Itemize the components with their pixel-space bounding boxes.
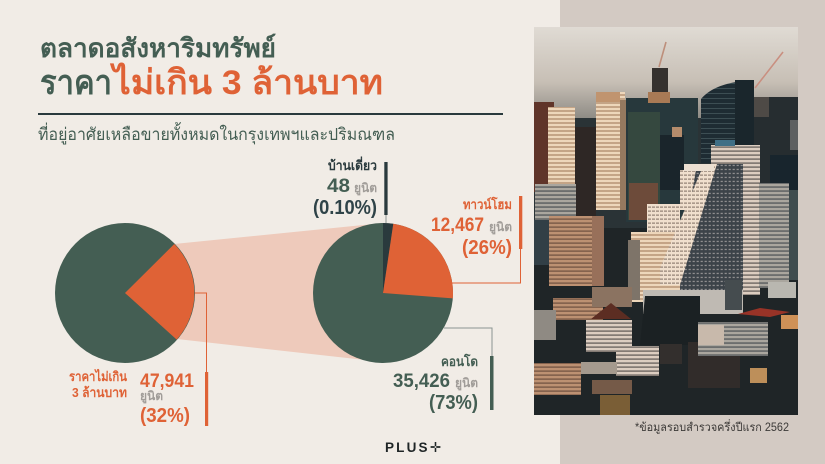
callout: detached house <box>313 156 388 223</box>
callout: townhome: ยูนิต <box>489 220 512 235</box>
construction tower <box>626 98 698 222</box>
footnote: *ข้อมูลรอบสำรวจครึ่งปีแรก 2562 <box>635 419 789 434</box>
red roof building <box>591 303 631 319</box>
logo: PLUS✛ <box>385 440 441 455</box>
callout: under 3 million baht: 3 ล้านบาท <box>72 385 127 400</box>
callout: condo <box>393 328 494 414</box>
callout: under 3 million baht: ยูนิต <box>140 389 163 404</box>
funnel connector between pies <box>174 223 383 362</box>
callout: condo: (73%) <box>429 392 478 414</box>
tall cream tower <box>596 92 625 210</box>
right side panel <box>560 0 825 464</box>
callout: detached house: 48 <box>327 176 350 197</box>
callout: townhome: 12,467 <box>431 215 484 236</box>
callout: under 3 million baht: (32%) <box>140 405 190 427</box>
low rise buildings <box>553 298 603 320</box>
lower left white building <box>535 184 576 220</box>
right pie chart <box>313 223 453 363</box>
callout: under 3 million baht: ราคาไม่เกิน <box>69 368 127 384</box>
right grey tower <box>759 183 789 288</box>
black tower <box>701 80 754 163</box>
right dark mass <box>754 97 798 192</box>
church silhouette and trees <box>640 296 700 345</box>
callout: townhome: ทาวน์โฮม <box>463 196 512 212</box>
callout: under 3 million baht <box>69 293 208 427</box>
left pie chart <box>55 223 195 363</box>
photo: city skyline <box>534 27 798 415</box>
title: ตลาดอสังหาริมทรัพย์ <box>40 33 276 63</box>
callout: townhome <box>431 196 522 283</box>
callout: detached house: (0.10%) <box>313 197 377 219</box>
slanted tower <box>631 232 681 302</box>
cream tower left <box>548 107 575 187</box>
callout: condo: ยูนิต <box>455 376 478 391</box>
subtitle: ที่อยู่อาศัยเหลือขายทั้งหมดในกรุงเทพฯและปริมณฑล <box>38 122 395 145</box>
callout: condo: คอนโด <box>441 353 478 369</box>
callout: detached house: ยูนิต <box>354 181 377 196</box>
peach mid tower <box>549 216 604 286</box>
far left red building <box>534 102 554 192</box>
callout: condo: 35,426 <box>393 371 450 392</box>
title: ราคา <box>40 64 112 102</box>
title <box>40 33 383 102</box>
white block <box>711 145 760 295</box>
callout: townhome: (26%) <box>462 237 512 259</box>
title: ไม่เกิน 3 ล้านบาท <box>110 62 383 102</box>
callout: detached house: บ้านเดี่ยว <box>328 156 377 173</box>
callout: under 3 million baht: 47,941 <box>140 371 194 392</box>
